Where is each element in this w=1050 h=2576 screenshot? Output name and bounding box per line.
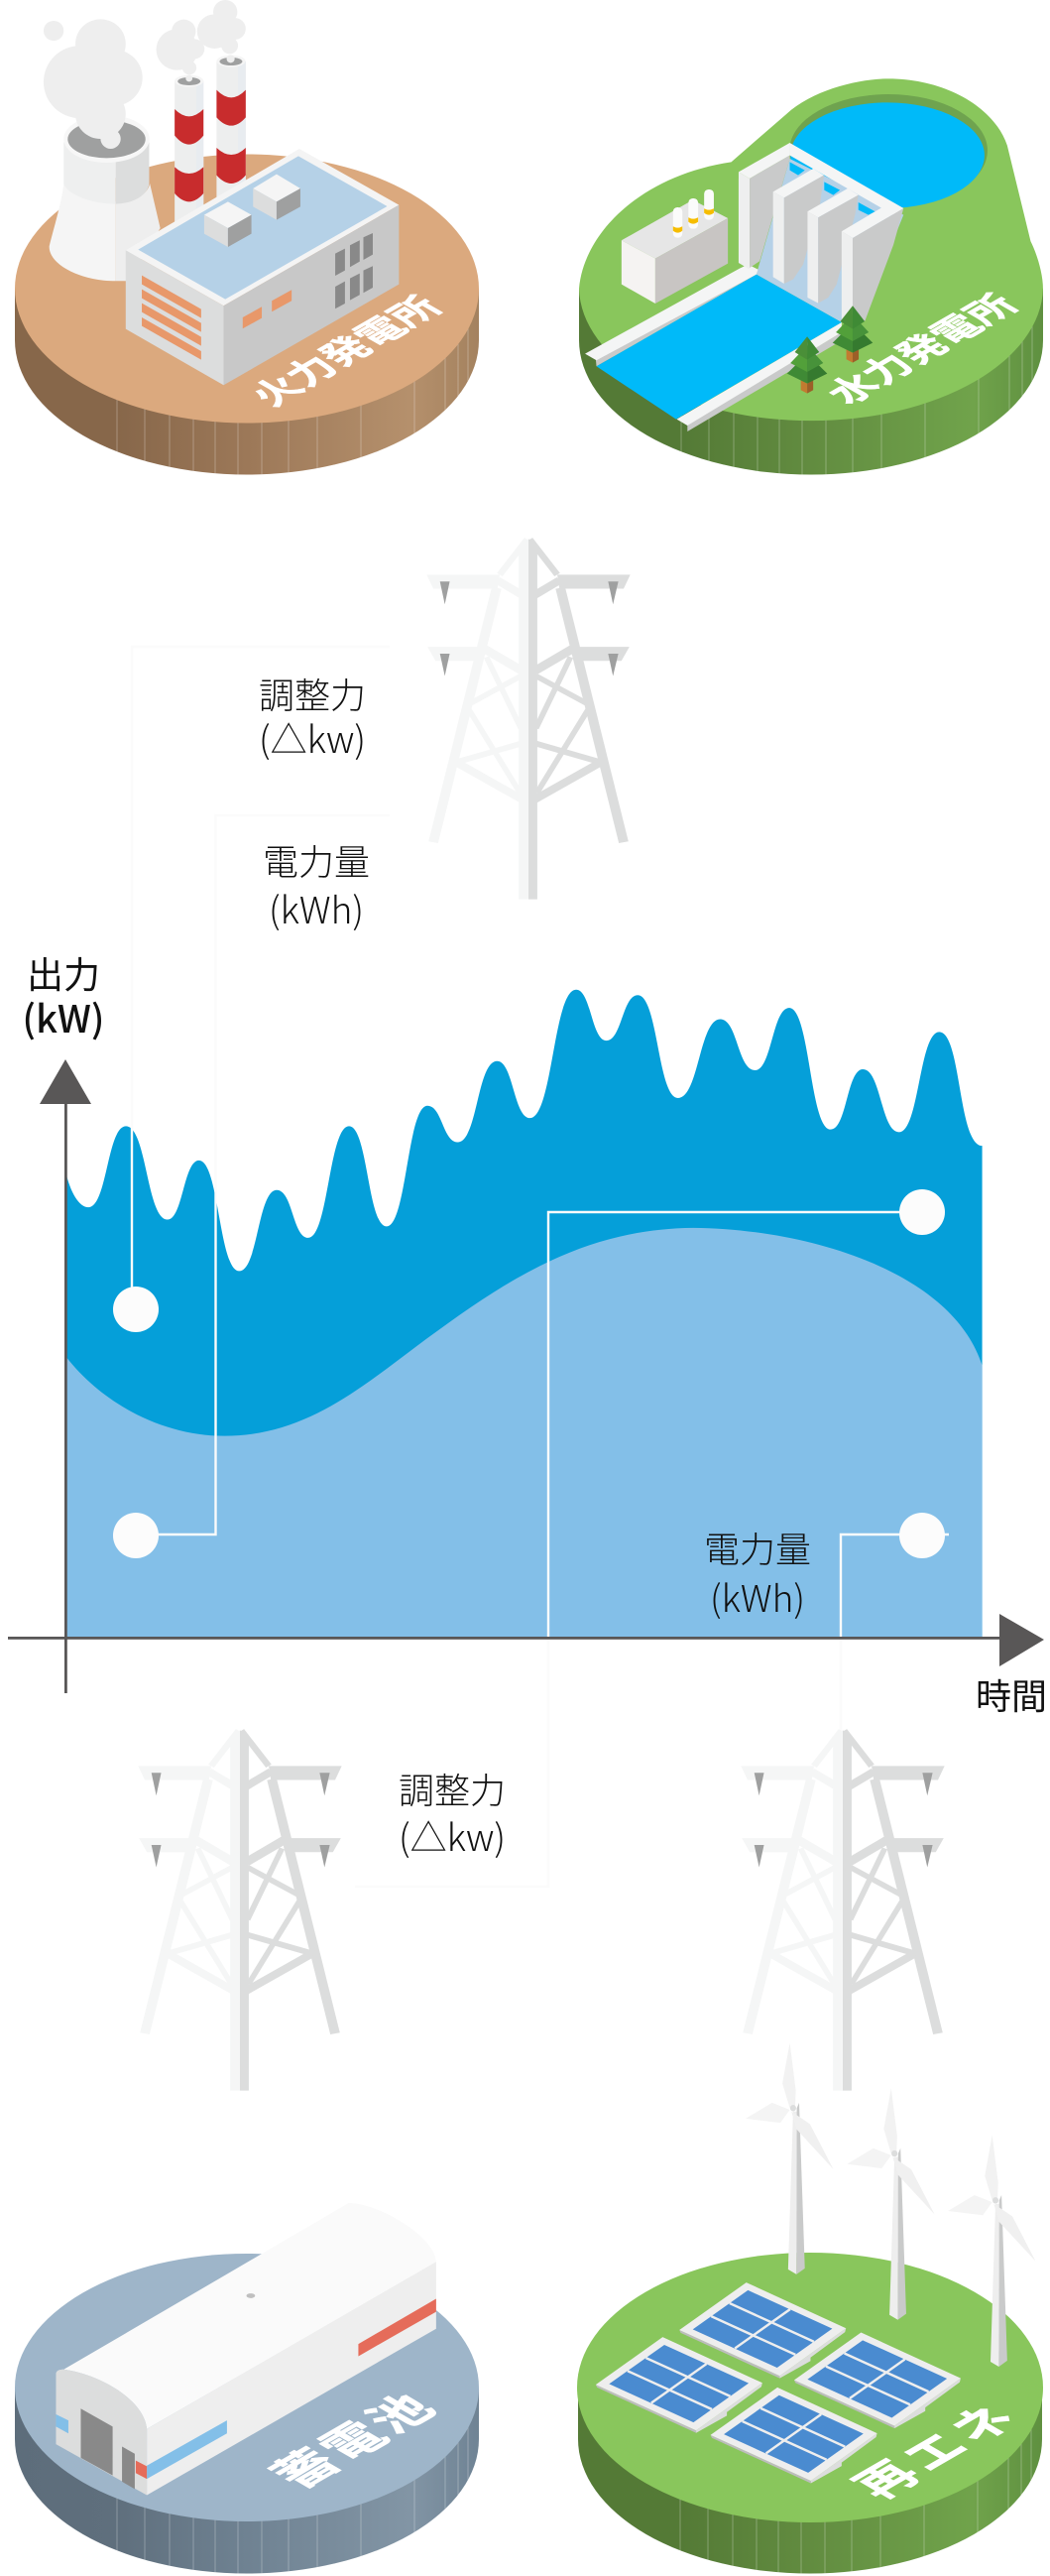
label: energy lower	[704, 1522, 811, 1623]
icon: battery building	[56, 2203, 436, 2496]
axis label: output: 出力	[27, 945, 100, 999]
label: hydro power: 水力発電所	[809, 284, 1030, 412]
panel: thermal power plant disc	[15, 0, 479, 487]
icon: chimney smoke	[157, 0, 246, 81]
label: energy upper	[263, 834, 370, 934]
label: renewable energy: 再エネ	[831, 2390, 1037, 2508]
icon: pine trees	[787, 306, 873, 394]
label: adjustment power upper: (△kw)	[259, 710, 366, 764]
disc side	[579, 289, 1043, 487]
horizontal axis arrow	[8, 1614, 1044, 1666]
chart: output over time	[8, 647, 1047, 1887]
panel: hydro power plant disc	[579, 78, 1043, 487]
icon: wind turbines	[746, 2043, 1036, 2367]
area: energy	[65, 1228, 983, 1639]
axis label: output	[23, 945, 104, 1043]
icon: chimney left	[175, 75, 203, 226]
label: adjustment power upper: 調整力	[259, 668, 366, 719]
disc top	[577, 2253, 1043, 2522]
river walls	[585, 265, 842, 431]
label: adjustment power lower	[399, 1763, 506, 1862]
icon: cooling tower	[50, 115, 161, 281]
panel: renewable energy disc	[577, 2043, 1043, 2576]
label: adjustment power upper	[259, 668, 366, 764]
icon: factory building	[126, 149, 399, 385]
label: energy upper: (kWh)	[269, 881, 364, 934]
label: thermal power: 火力発電所	[233, 286, 454, 414]
disc top	[15, 2254, 479, 2521]
panel: battery disc	[15, 2203, 479, 2576]
icon: transformer	[622, 189, 728, 304]
label: energy lower: (kWh)	[710, 1569, 805, 1623]
marker dots	[113, 1189, 945, 1558]
dam illustration	[579, 78, 1043, 431]
icon: transmission tower upper	[426, 539, 631, 900]
axis label: time: 時間	[976, 1668, 1047, 1720]
label: battery: 蓄電池	[249, 2379, 454, 2498]
label: energy upper: 電力量	[263, 834, 370, 886]
icon: solar panels	[596, 2282, 961, 2484]
icon: large smoke cloud	[44, 19, 143, 149]
label: adjustment power lower: (△kw)	[399, 1808, 506, 1862]
waterfall	[757, 159, 903, 322]
label: energy lower: 電力量	[704, 1522, 811, 1573]
leader lines	[132, 647, 949, 1887]
disc side	[15, 2388, 479, 2576]
dam structure	[739, 143, 903, 325]
icon: transmission tower lower right	[741, 1730, 945, 2091]
disc side	[15, 289, 479, 487]
label: adjustment power lower: 調整力	[399, 1763, 506, 1814]
area: adjustment power	[65, 990, 983, 1639]
axis label: output: (kW)	[23, 989, 104, 1043]
vertical axis arrow	[40, 1059, 91, 1693]
icon: transmission tower lower left	[138, 1730, 342, 2091]
hill and disc top	[579, 78, 1043, 421]
river	[597, 275, 842, 420]
plant illustration	[44, 0, 399, 385]
reservoir	[789, 94, 988, 208]
disc top	[15, 155, 479, 423]
icon: chimney right	[216, 56, 246, 200]
disc side	[578, 2388, 1042, 2576]
